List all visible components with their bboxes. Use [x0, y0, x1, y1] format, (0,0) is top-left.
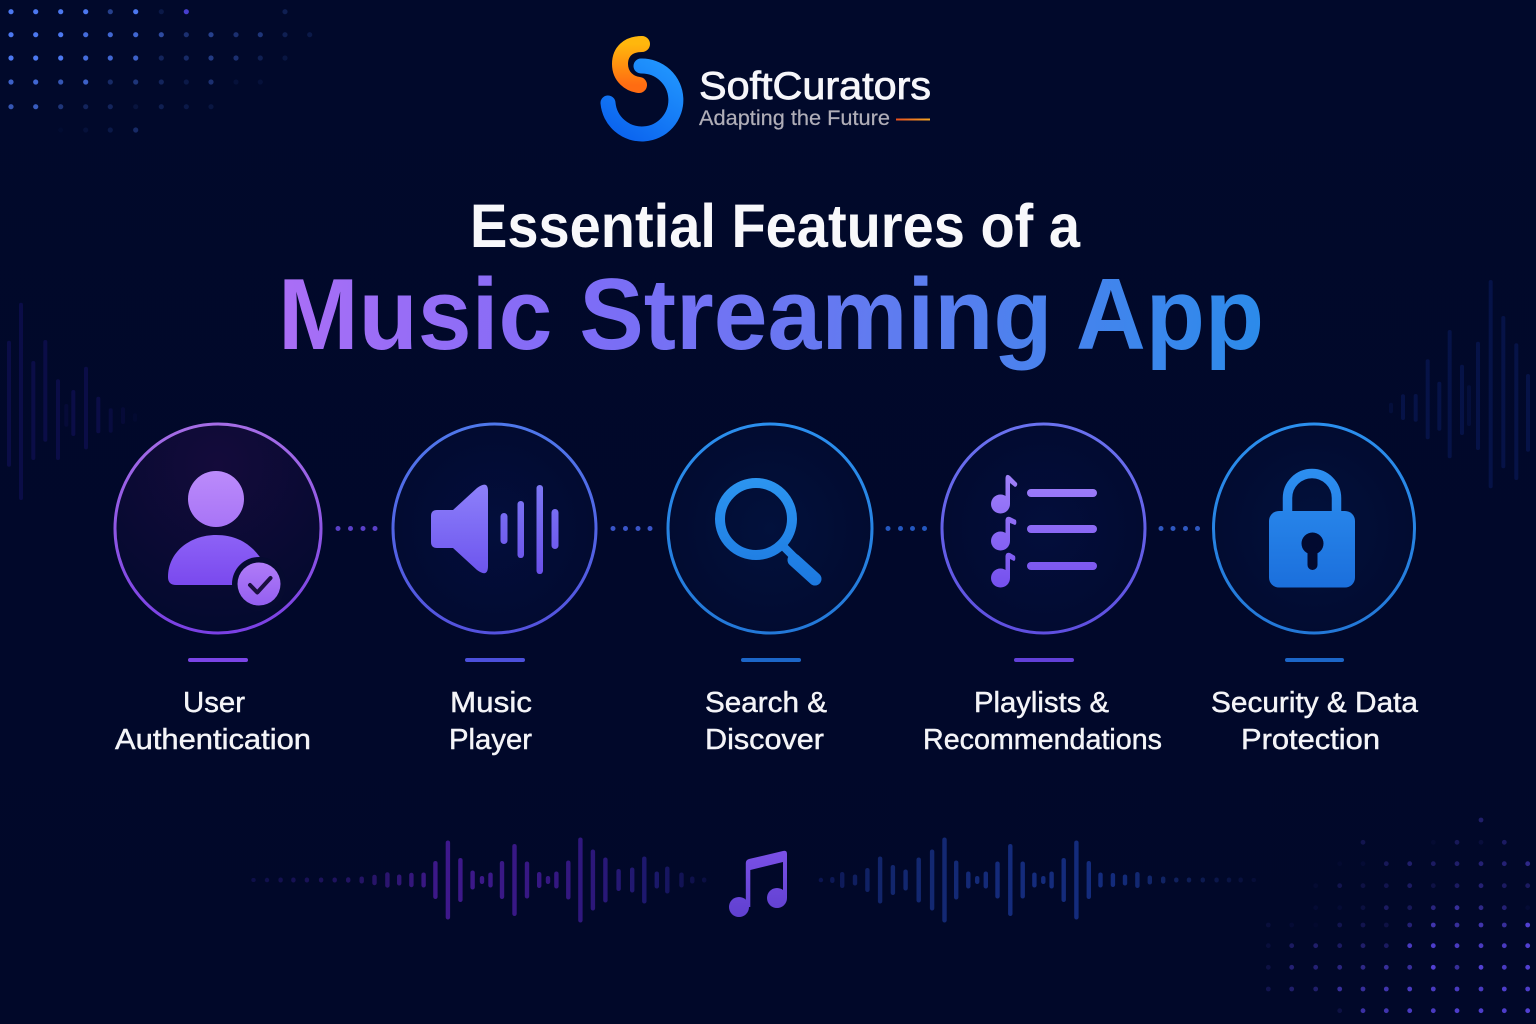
feature: Search & Discover [668, 424, 872, 756]
connector dots 1 [336, 526, 378, 531]
label: Discover [705, 724, 824, 756]
connector dots 3 [886, 526, 927, 531]
feature: Playlists & Recommendations [923, 424, 1162, 756]
icon: padlock [1269, 474, 1355, 588]
decoration: left side waveform [7, 303, 137, 500]
decoration: right side waveform [1389, 280, 1530, 488]
underline [741, 658, 801, 662]
decoration: top-left dot field [8, 9, 312, 133]
title line 1: Essential Features of a [470, 192, 1081, 260]
title line 2: Music Streaming App [278, 259, 1264, 371]
icon: music note [729, 851, 787, 917]
circle badge [942, 424, 1145, 633]
icon: music playlist [991, 475, 1097, 588]
label: Playlists & [974, 687, 1109, 719]
label: Music [450, 687, 532, 719]
label: User [183, 687, 245, 719]
bottom waveform: right [819, 838, 1256, 922]
tagline accent line [896, 118, 930, 120]
feature: Music Player [393, 424, 596, 756]
decoration: bottom-right dot field [1266, 818, 1530, 1013]
bottom waveform: left [251, 838, 706, 922]
brand name: SoftCurators [699, 65, 931, 108]
icon: verified user [168, 471, 286, 611]
connector dots 4 [1158, 526, 1200, 531]
label: Search & [705, 687, 827, 719]
label: Security & Data [1211, 687, 1419, 719]
tagline: Adapting the Future [699, 107, 890, 130]
logo: SoftCurators [608, 44, 931, 134]
underline [465, 658, 525, 662]
underline [1014, 658, 1074, 662]
feature: Security & Data Protection [1211, 424, 1419, 756]
circle badge [1214, 424, 1414, 633]
circle badge [115, 424, 321, 633]
icon: magnifier [720, 483, 815, 579]
label: Authentication [115, 724, 311, 756]
circle badge [668, 424, 872, 633]
underline [188, 658, 248, 662]
icon: speaker with sound bars [431, 485, 558, 574]
circle badge [393, 424, 596, 633]
label: Recommendations [923, 724, 1162, 756]
logo mark [608, 44, 676, 134]
label: Protection [1241, 724, 1380, 756]
label: Player [449, 724, 532, 756]
feature: User Authentication [115, 424, 321, 756]
connector dots 2 [610, 526, 652, 531]
underline [1285, 658, 1344, 662]
